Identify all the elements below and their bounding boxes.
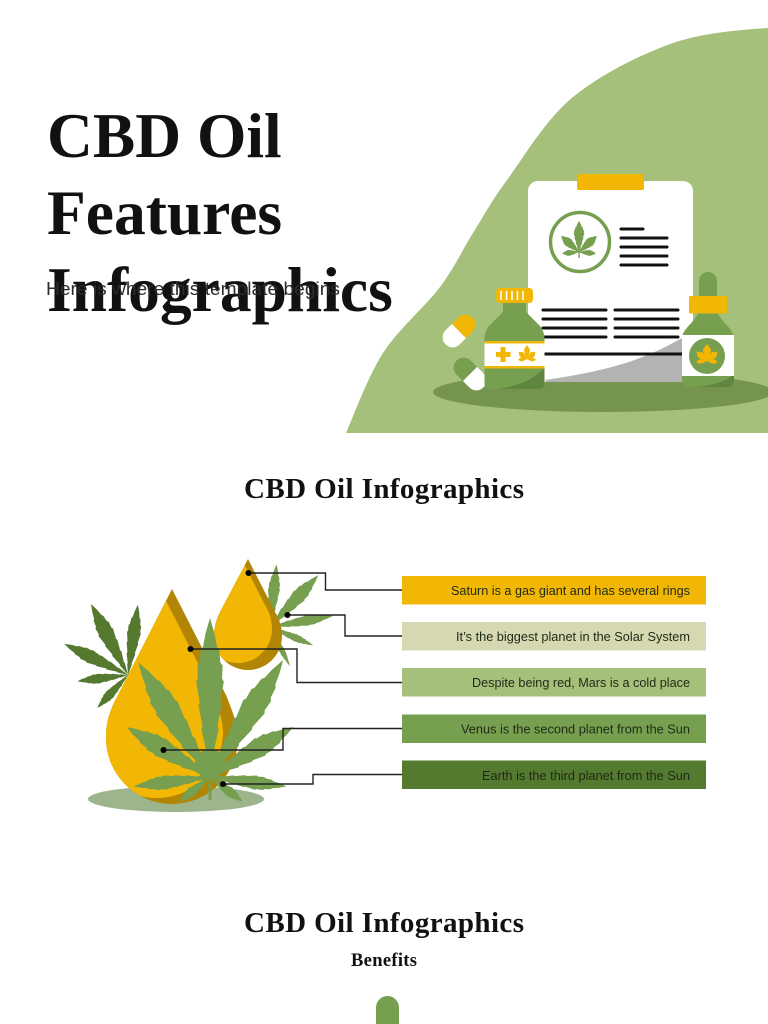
- green rounded pill start of next chart: [376, 996, 399, 1024]
- section heading: CBD Oil Infographics: [244, 473, 524, 505]
- label bar: Venus: Venus is the second planet from the Sun: [461, 722, 690, 736]
- second section heading: CBD Oil Infographics: [244, 907, 524, 939]
- ground shadow: [88, 786, 264, 812]
- clipboard document: [528, 174, 693, 382]
- small back leaf: [264, 564, 334, 668]
- pill: yellow and white: [438, 310, 480, 352]
- small oil drop: [214, 559, 282, 670]
- large oil drop: [106, 589, 238, 804]
- label bar: Jupiter: It’s the biggest planet in the Solar System: [456, 630, 690, 644]
- label bar: Saturn: Saturn is a gas giant and has several rings: [451, 584, 690, 598]
- label bar: Saturn: [402, 576, 706, 604]
- label bar: Mars: Despite being red, Mars is a cold place: [472, 676, 690, 690]
- main title: Infographics: [47, 254, 393, 325]
- hero background blob: [346, 28, 768, 433]
- pill: green and white: [449, 353, 491, 395]
- label bar: Jupiter: [402, 622, 706, 650]
- oil drops and leaves illustration: [61, 552, 334, 812]
- label bar: Earth: [402, 760, 706, 789]
- label bar: Mars: [402, 668, 706, 696]
- ground shadow: [433, 372, 768, 412]
- main title: [47, 100, 393, 325]
- oil bottle with cross label: [484, 288, 544, 389]
- benefits subheading: Benefits: [351, 951, 417, 971]
- front cannabis leaf: [122, 618, 298, 806]
- connector lines with dots: [160, 570, 402, 787]
- label bar: Venus: [402, 714, 706, 743]
- subtitle: Here is where this template begins: [46, 279, 340, 299]
- label bar: Earth: Earth is the third planet from the Sun: [482, 769, 690, 783]
- dark back leaf: [61, 600, 145, 711]
- main title: CBD Oil: [47, 100, 282, 171]
- dropper bottle with leaf label: [682, 272, 734, 387]
- hero illustration: CBD prescription and bottles: [433, 174, 768, 412]
- main title: Features: [47, 177, 282, 248]
